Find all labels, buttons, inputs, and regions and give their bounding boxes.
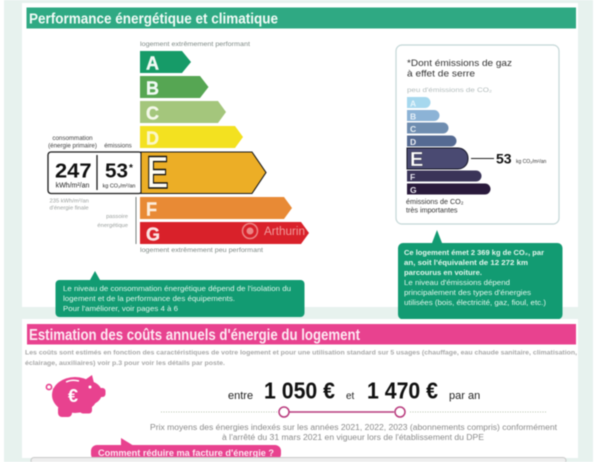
icon: piggy bank with euro — [46, 375, 106, 417]
heading: greenhouse gases: à effet de serre — [407, 68, 475, 78]
energy class D — [140, 126, 243, 148]
callout: energy consumption: Le niveau de consommation énergétique dépend de l'isolation du — [63, 285, 291, 293]
watermark: Arthurimmo — [242, 224, 305, 238]
callout: emissions: Le niveau d'émissions dépend — [404, 280, 510, 287]
callout: emissions: an, soit l'équivalent de 12 272 km — [404, 260, 528, 267]
value: emissions: 53 — [105, 160, 128, 182]
final energy note: 235 kWh/m²/an — [50, 198, 89, 204]
energy class A — [140, 51, 191, 74]
final energy note: d'énergie finale — [50, 206, 89, 212]
axis labels: consumption and emissions: (énergie primaire) — [48, 142, 97, 150]
emission class E with value: 53 — [496, 150, 512, 166]
intro text: éclairage, auxiliaires) voir p.3 pour voir les détails par poste. — [25, 360, 225, 367]
emission class E with value: E — [410, 149, 423, 171]
final energy note — [50, 198, 89, 212]
label: high emissions — [406, 197, 464, 214]
cost range values: par an — [449, 390, 480, 402]
callout: emissions: utilisées (bois, électricité, gaz, fioul, etc.) — [404, 300, 546, 307]
emission class C: C — [410, 124, 416, 134]
energy class G: G — [146, 224, 160, 244]
emission class G — [407, 184, 491, 195]
callout: how to reduce the bill — [91, 438, 281, 460]
label: passoire énergétique: passoire — [106, 214, 128, 220]
panel: annual energy costs — [22, 319, 578, 460]
energy class C: C — [146, 104, 159, 124]
emission class D: D — [410, 137, 416, 147]
heading: annual costs: Estimation des coûts annuels d'énergie du logement — [29, 327, 360, 344]
value: emissions — [103, 160, 135, 190]
label: passoire énergétique — [97, 214, 128, 229]
emission class C — [407, 122, 448, 134]
emission class A: A — [410, 98, 416, 108]
emission class F: F — [410, 172, 415, 182]
cost range values: entre — [228, 390, 253, 402]
energy class F — [140, 197, 292, 220]
energy class C — [140, 101, 226, 124]
cost range values: 1 470 € — [367, 378, 438, 404]
callout: emissions: parcourus en voiture. — [404, 270, 482, 277]
emission class B — [407, 110, 440, 122]
watermark: Arthurimmo: Arthurin — [264, 226, 305, 238]
cost range values: 1 050 € — [264, 378, 335, 404]
bottom card edge — [31, 458, 566, 462]
price note — [150, 423, 558, 442]
label: top of energy scale: logement extrêmement performant — [140, 41, 250, 48]
cost range slider — [161, 407, 546, 417]
emission class E with value: kg CO₂/m²/an — [516, 159, 546, 165]
callout: emissions — [398, 230, 562, 320]
callout: energy consumption — [56, 271, 304, 317]
intro text — [25, 350, 577, 367]
emission class B: B — [410, 112, 416, 122]
axis labels: consumption and emissions: émissions — [104, 142, 132, 150]
value: emissions: * — [129, 163, 133, 174]
cost range values — [228, 378, 480, 404]
energy class E with values — [48, 147, 266, 198]
heading: annual costs — [27, 324, 576, 344]
callout: energy consumption: logement et de la performance des équipements. — [63, 295, 235, 303]
emission class D — [407, 136, 456, 147]
energy class A: A — [146, 54, 159, 74]
emission class E with value — [407, 148, 546, 171]
heading: energy performance: Performance énergétique et climatique — [29, 10, 278, 28]
price note: Prix moyens des énergies indexés sur les années 2021, 2022, 2023 (abonnements compris) conformément — [150, 423, 558, 432]
price note: à l'arrêté du 31 mars 2021 en vigueur lors de l'établissement du DPE — [222, 433, 484, 442]
letter E: E — [146, 147, 168, 198]
heading: energy performance — [26, 8, 576, 28]
value: emissions: kg CO₂/m²/an — [103, 184, 135, 190]
axis labels: consumption and emissions — [48, 135, 132, 150]
callout: energy consumption: Pour l'améliorer, voir pages 4 à 6 — [63, 305, 178, 313]
label: high emissions: émissions de CO₂ — [406, 197, 464, 206]
emission class A — [407, 97, 430, 108]
axis labels: consumption and emissions: consommation — [52, 135, 93, 142]
callout: emissions: Ce logement émet 2 369 kg de CO₂, par — [404, 250, 544, 257]
emission class F — [407, 170, 482, 182]
callout: emissions: principalement des types d'énergies — [404, 290, 532, 297]
callout: how to reduce the bill: Comment réduire ma facture d'énergie ? — [98, 448, 274, 459]
label: low emissions: peu d'émissions de CO₂ — [407, 87, 493, 94]
icon: piggy bank with euro: € — [68, 386, 78, 406]
heading: greenhouse gases: *Dont émissions de gaz — [407, 58, 512, 68]
value: primary energy: kWh/m²/an — [56, 182, 90, 190]
label: high emissions: très importantes — [406, 206, 458, 214]
energy class B — [140, 76, 208, 98]
label: bottom of energy scale: logement extrêmement peu performant — [140, 247, 263, 254]
value: primary energy: 247 — [55, 160, 92, 182]
value: primary energy — [55, 160, 92, 190]
label: passoire énergétique: énergétique — [97, 223, 128, 229]
panel: energy performance — [22, 3, 578, 320]
cost range values: et — [346, 391, 355, 402]
emission class G: G — [410, 185, 417, 195]
energy class F: F — [146, 200, 157, 220]
intro text: Les coûts sont estimés en fonction des caractéristiques de votre logement et pour une utilisation standard sur 5 usages (chauffage, eau chaude sanitaire, climatisation, — [25, 350, 577, 356]
panel: greenhouse gas emissions — [396, 45, 559, 224]
heading: greenhouse gases — [407, 58, 512, 78]
energy class D: D — [146, 128, 159, 148]
energy class B: B — [146, 78, 159, 98]
energy class G — [140, 222, 309, 244]
